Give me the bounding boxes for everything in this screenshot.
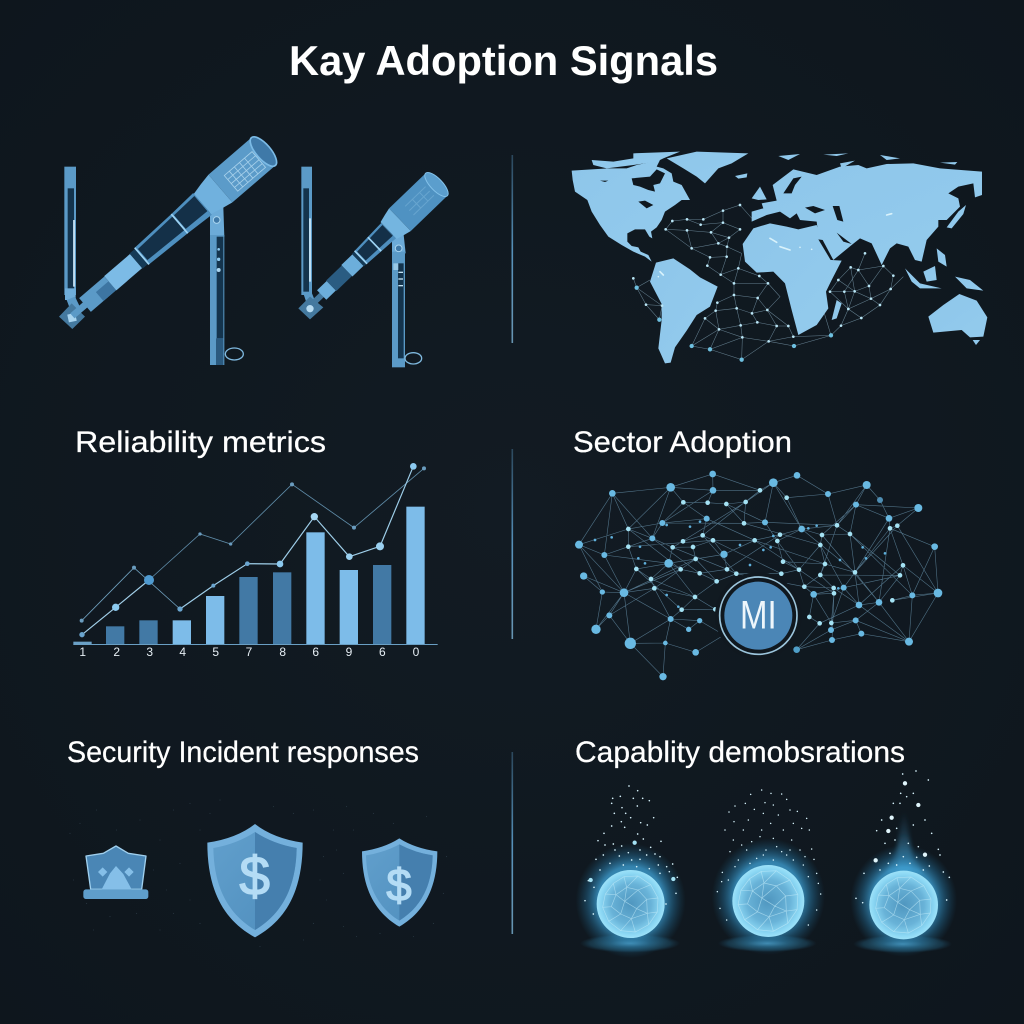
icon: small telescope: [298, 167, 452, 367]
axis labels: 1: [79, 645, 86, 659]
line series: lower link: [82, 568, 180, 621]
icon: large shield with dollar: [207, 824, 303, 937]
badge: MI: MI: [740, 594, 777, 638]
title: Kay Adoption Signals: [289, 37, 718, 84]
icon: crown badge: [83, 846, 148, 899]
axis labels: 2: [113, 645, 120, 659]
orb two: [712, 790, 825, 955]
axis labels: [79, 645, 420, 659]
badge: MI: [715, 572, 802, 659]
line series: main: [180, 466, 413, 609]
axis labels: 6: [312, 645, 319, 659]
line series: thin: [149, 468, 424, 580]
map: network nodes: [633, 205, 893, 341]
icon: small shield with dollar: [362, 838, 437, 927]
panel: world map with network: [572, 152, 987, 363]
panel: capability orbs: [576, 771, 957, 958]
panel: security icons: [70, 800, 447, 947]
axis labels: 3: [146, 645, 153, 659]
axis labels: 8: [279, 645, 286, 659]
axis labels: 0: [413, 645, 420, 659]
line series: rising: [82, 580, 149, 635]
map: continents: [572, 152, 987, 363]
icon: small shield with dollar: $: [386, 859, 412, 910]
heading: sector adoption: Sector Adoption: [573, 426, 792, 459]
network extra tiny nodes: [595, 522, 885, 607]
network small bright nodes: [628, 490, 903, 623]
map: bright spots on land: [658, 214, 892, 277]
axis labels: 5: [212, 645, 219, 659]
network nodes: [575, 471, 942, 680]
orb one: [576, 786, 686, 958]
heading: capability demonstrations: Capablity demobsrations: [575, 736, 905, 769]
axis: [73, 644, 438, 645]
panel: telescopes: [59, 133, 452, 367]
orb three: [850, 771, 957, 957]
axis labels: 7: [246, 645, 253, 659]
axis labels: 4: [179, 645, 186, 659]
chart: reliability metrics: [73, 463, 438, 659]
axis labels: 6: [379, 645, 386, 659]
heading: reliability metrics: Reliability metrics: [75, 426, 326, 459]
bars: [73, 507, 425, 644]
map: network connections: [633, 205, 903, 360]
network links: [579, 474, 938, 677]
map: inland water: [600, 169, 852, 260]
heading: security incident responses: Security Incident responses: [67, 736, 419, 769]
axis labels: 9: [346, 645, 353, 659]
data points: [79, 463, 426, 637]
icon: large shield with dollar: $: [239, 845, 270, 907]
map: larger nodes: [637, 288, 831, 360]
network diagram: sector adoption: [575, 471, 942, 680]
icon: large telescope: [59, 133, 281, 365]
